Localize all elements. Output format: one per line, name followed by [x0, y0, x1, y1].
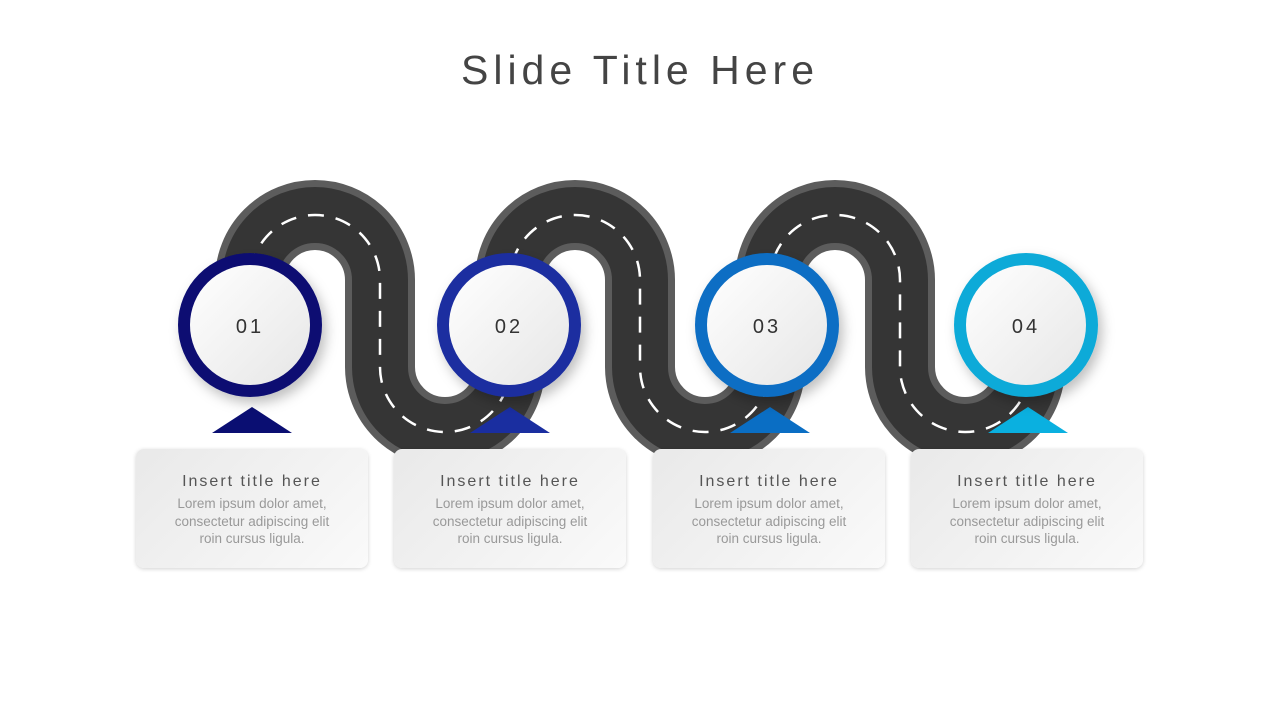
- marker 02: 02: [495, 316, 523, 338]
- box 4: Lorem ipsum dolor amet,: [952, 496, 1102, 511]
- box 3: Lorem ipsum dolor amet,: [694, 496, 844, 511]
- marker 02: [437, 253, 581, 433]
- box 3: consectetur adipiscing elit: [692, 514, 846, 528]
- box 3: [653, 449, 885, 568]
- box 1: consectetur adipiscing elit: [175, 514, 329, 528]
- box 1: roin cursus ligula.: [199, 531, 305, 546]
- box 2: Lorem ipsum dolor amet,: [435, 496, 585, 511]
- title: Slide Title Here: [461, 47, 819, 93]
- box 2: [394, 449, 626, 568]
- box 3: roin cursus ligula.: [716, 531, 822, 546]
- box 4: roin cursus ligula.: [974, 531, 1080, 546]
- box 1: [136, 449, 368, 568]
- box 1: Lorem ipsum dolor amet,: [177, 496, 327, 511]
- box 2: consectetur adipiscing elit: [433, 514, 587, 528]
- marker 04: [954, 253, 1098, 433]
- marker 03: [695, 253, 839, 433]
- marker 01: [178, 253, 322, 433]
- box 1: Insert title here: [182, 473, 322, 490]
- box 3: Insert title here: [699, 473, 839, 490]
- road: [250, 215, 1030, 432]
- box 2: Insert title here: [440, 473, 580, 490]
- marker 01: 01: [236, 316, 264, 338]
- box 2: roin cursus ligula.: [457, 531, 563, 546]
- box 4: Insert title here: [957, 473, 1097, 490]
- marker 03: 03: [753, 316, 781, 338]
- marker 04: 04: [1012, 316, 1040, 338]
- box 4: [911, 449, 1143, 568]
- box 4: consectetur adipiscing elit: [950, 514, 1104, 528]
